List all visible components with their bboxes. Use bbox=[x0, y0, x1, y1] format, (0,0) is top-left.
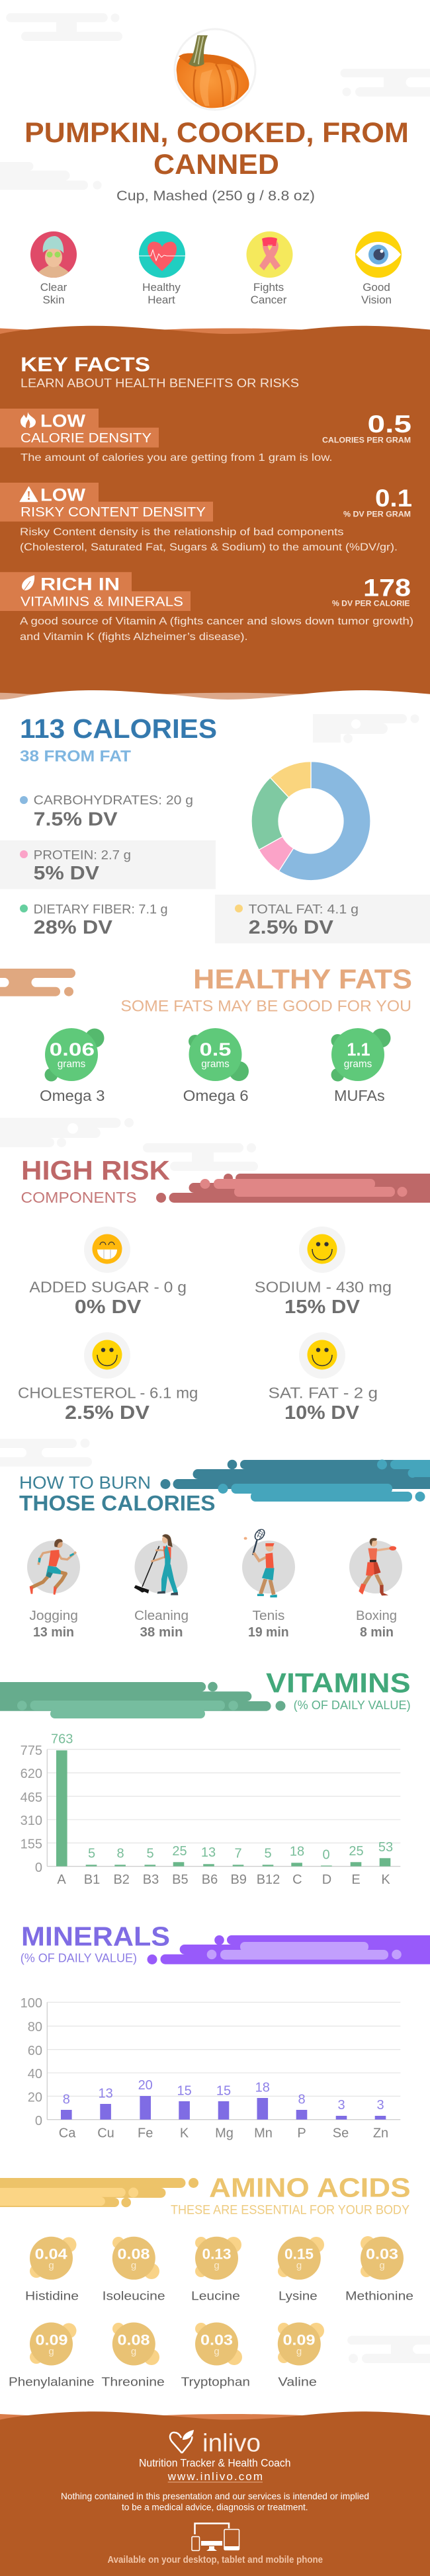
bar chart: vitamins: 25 bbox=[172, 1844, 187, 1859]
label: healthy heart: Healthy bbox=[142, 281, 181, 294]
bar chart: vitamins: 310 bbox=[21, 1814, 42, 1828]
bar chart: minerals: Zn bbox=[373, 2126, 388, 2140]
icon: good vision bbox=[355, 231, 402, 278]
bar chart: minerals: K bbox=[180, 2126, 189, 2140]
heading: 113 calories: 113 CALORIES bbox=[20, 713, 217, 744]
subheading: THESE ARE ESSENTIAL FOR YOUR BODY bbox=[171, 2203, 409, 2217]
legend: total fat: 2.5% DV bbox=[249, 917, 334, 938]
activity label: boxing: 8 min bbox=[360, 1625, 394, 1640]
bar chart: vitamins: C bbox=[292, 1872, 302, 1887]
amino: lysine: 0.15 bbox=[284, 2246, 314, 2263]
label: clear skin bbox=[40, 281, 67, 306]
hero: pumpkin photo in ring bbox=[175, 29, 255, 110]
item: added sugar bbox=[29, 1227, 187, 1318]
fat: omega 3 bbox=[40, 1028, 105, 1104]
activity label: cleaning bbox=[134, 1609, 189, 1640]
fact: risky content density: 0.1 bbox=[375, 485, 412, 512]
amino: isoleucine bbox=[103, 2237, 165, 2302]
amino: histidine: 0.04 bbox=[35, 2246, 68, 2263]
logo: inlivo bbox=[170, 2429, 261, 2457]
heading: vitamins: VITAMINS bbox=[266, 1667, 411, 1698]
panel: minerals bbox=[21, 1921, 430, 2140]
amino: threonine: 0.08 bbox=[118, 2332, 150, 2349]
bar chart: vitamins: D bbox=[322, 1872, 331, 1887]
legend: carbohydrates bbox=[20, 793, 193, 830]
activity label: jogging: 13 min bbox=[33, 1625, 74, 1640]
fat: omega 3: 0.06 bbox=[50, 1039, 95, 1060]
amino: phenylalanine bbox=[9, 2322, 95, 2388]
bar chart: vitamins: 5 bbox=[146, 1846, 154, 1861]
bar chart: minerals: Mg bbox=[215, 2126, 234, 2140]
legend: carbohydrates: 7.5% DV bbox=[34, 809, 118, 830]
subheading: 38 from fat: 38 FROM FAT bbox=[20, 747, 131, 765]
title: PUMPKIN, COOKED, FROM bbox=[24, 117, 409, 149]
amino: methionine: g bbox=[379, 2260, 385, 2271]
bar chart: minerals: Mn bbox=[254, 2126, 273, 2140]
bar chart: minerals: Cu bbox=[97, 2126, 114, 2140]
bar chart: vitamins: A bbox=[57, 1872, 66, 1887]
bar chart: vitamins: B9 bbox=[230, 1872, 247, 1887]
fat: omega 6: grams bbox=[201, 1059, 230, 1070]
fat: omega 6 bbox=[183, 1028, 249, 1104]
bar chart: vitamins: 7 bbox=[234, 1846, 242, 1861]
bar chart: vitamins: 620 bbox=[21, 1767, 42, 1781]
fact: rich in vitamins and minerals: VITAMINS & MINERALS bbox=[21, 595, 183, 610]
fat: omega 3: grams bbox=[58, 1059, 85, 1070]
activity label: jogging bbox=[29, 1609, 78, 1640]
amino: histidine: g bbox=[48, 2260, 54, 2271]
bar chart: minerals: 40 bbox=[28, 2067, 42, 2081]
fact: risky content density: % DV PER GRAM bbox=[343, 510, 411, 518]
fact: risky content density bbox=[0, 483, 412, 553]
legend: protein: 5% DV bbox=[34, 863, 100, 884]
amino: isoleucine: Isoleucine bbox=[103, 2288, 165, 2302]
item: sodium bbox=[255, 1227, 392, 1318]
bar chart: vitamins: B2 bbox=[113, 1872, 130, 1887]
bar chart: vitamins: 0 bbox=[35, 1861, 42, 1875]
benefit icons row bbox=[30, 231, 402, 306]
icon: devices bbox=[192, 2523, 239, 2551]
fact: rich in vitamins and minerals: 178 bbox=[363, 575, 411, 602]
bar chart: vitamins: 775 bbox=[21, 1744, 42, 1758]
panel: calories bbox=[0, 713, 430, 944]
amino: phenylalanine: g bbox=[48, 2346, 54, 2357]
item: sodium: 15% DV bbox=[284, 1297, 361, 1318]
activity: cleaning bbox=[134, 1534, 188, 1595]
amino: methionine: 0.03 bbox=[366, 2246, 398, 2263]
bar chart: minerals: 3 bbox=[376, 2098, 384, 2113]
heading: how to burn those calories: HOW TO BURN bbox=[19, 1473, 151, 1493]
fact: rich in vitamins and minerals: % DV PER CALORIE bbox=[332, 600, 410, 608]
label: clear skin: Clear bbox=[40, 281, 67, 294]
activity label: cleaning: Cleaning bbox=[134, 1609, 189, 1623]
subheading: SOME FATS MAY BE GOOD FOR YOU bbox=[120, 997, 411, 1015]
icon: clear skin bbox=[30, 231, 77, 278]
heading: how to burn those calories bbox=[19, 1473, 216, 1515]
fat: mufas: MUFAs bbox=[334, 1087, 385, 1104]
icon: warning triangle bbox=[20, 487, 38, 502]
item: saturated fat bbox=[269, 1332, 378, 1424]
amino: threonine: Threonine bbox=[101, 2374, 165, 2388]
amino: histidine bbox=[25, 2237, 79, 2302]
fact: risky content density: LOW bbox=[40, 485, 85, 504]
legend: total fat: TOTAL FAT: 4.1 g bbox=[249, 902, 359, 916]
bar chart: minerals: 60 bbox=[28, 2044, 42, 2058]
disclaimer bbox=[61, 2491, 369, 2513]
bar chart: vitamins: E bbox=[351, 1872, 361, 1887]
item: cholesterol bbox=[18, 1332, 198, 1424]
fact: rich in vitamins and minerals: and Vitamin K (fights Alzheimer’s disease). bbox=[20, 631, 247, 643]
bar chart: vitamins: B3 bbox=[143, 1872, 159, 1887]
label: fights cancer bbox=[251, 281, 287, 306]
bar chart: minerals: 20 bbox=[138, 2078, 153, 2093]
footer bbox=[0, 2411, 430, 2576]
label: clear skin: Skin bbox=[42, 294, 65, 306]
bar chart: minerals: 3 bbox=[337, 2098, 345, 2113]
panel: how to burn calories bbox=[19, 1460, 430, 1640]
activity: jogging bbox=[27, 1539, 80, 1595]
panel: vitamins bbox=[0, 1667, 411, 1887]
tagline: Nutrition Tracker & Health Coach bbox=[139, 2457, 291, 2470]
header shape bbox=[160, 1460, 430, 1502]
bar chart: minerals: Fe bbox=[138, 2126, 153, 2140]
item: saturated fat: 10% DV bbox=[284, 1402, 360, 1424]
item: cholesterol: 2.5% DV bbox=[65, 1402, 150, 1424]
bar chart: vitamins: 5 bbox=[264, 1846, 272, 1861]
fact: rich in vitamins and minerals: A good source of Vitamin A (fights cancer and slows down tumor growth) bbox=[20, 616, 413, 627]
heading: high risk: HIGH RISK bbox=[21, 1155, 170, 1186]
bar chart: vitamins: 155 bbox=[21, 1837, 42, 1851]
heading: minerals: MINERALS bbox=[21, 1921, 170, 1952]
bar chart: minerals: 15 bbox=[216, 2083, 231, 2098]
fat: omega 6: Omega 6 bbox=[183, 1087, 249, 1104]
subheading: (% OF DAILY VALUE) bbox=[294, 1698, 411, 1712]
fat: mufas bbox=[331, 1028, 390, 1104]
bar chart: minerals: P bbox=[297, 2126, 306, 2140]
item: added sugar: ADDED SUGAR - 0 g bbox=[29, 1278, 187, 1295]
label: fights cancer: Fights bbox=[253, 281, 284, 294]
fact: calorie density: CALORIES PER GRAM bbox=[322, 436, 411, 444]
bar chart: vitamins: 13 bbox=[201, 1845, 216, 1860]
legend: carbohydrates: CARBOHYDRATES: 20 g bbox=[34, 793, 193, 808]
legend: dietary fiber: 28% DV bbox=[34, 917, 113, 938]
pumpkin ring bbox=[175, 29, 255, 110]
header shape bbox=[0, 1682, 286, 1718]
label: healthy heart bbox=[142, 281, 181, 306]
header shape bbox=[147, 1935, 430, 1964]
bar chart: minerals: 13 bbox=[98, 2087, 113, 2101]
label: fights cancer: Cancer bbox=[251, 294, 287, 306]
heading: key facts: KEY FACTS bbox=[21, 353, 150, 376]
pumpkin illustration bbox=[177, 35, 249, 108]
amino: leucine: g bbox=[214, 2260, 220, 2271]
bar chart: vitamins bbox=[21, 1732, 400, 1887]
activity label: tennis bbox=[248, 1609, 289, 1640]
amino: valine: Valine bbox=[278, 2374, 317, 2388]
fact: rich in vitamins and minerals bbox=[0, 572, 413, 643]
icon: flame bbox=[21, 412, 36, 428]
bar chart: minerals: 8 bbox=[63, 2093, 70, 2107]
amino: valine bbox=[278, 2322, 324, 2388]
amino: isoleucine: g bbox=[131, 2260, 136, 2271]
item: sodium: SODIUM - 430 mg bbox=[255, 1278, 392, 1295]
amino: lysine: Lysine bbox=[279, 2288, 318, 2302]
fat: omega 6: 0.5 bbox=[200, 1039, 232, 1060]
legend: dietary fiber bbox=[20, 902, 168, 938]
disclaimer: Nothing contained in this presentation and our services is intended or implied bbox=[61, 2491, 369, 2501]
amino: tryptophan: 0.03 bbox=[200, 2332, 233, 2349]
icon: fights cancer bbox=[246, 231, 292, 278]
title: CANNED bbox=[153, 149, 279, 181]
header shape bbox=[0, 969, 75, 996]
bar chart: minerals: Ca bbox=[59, 2126, 76, 2140]
bar chart: minerals bbox=[21, 1996, 400, 2140]
bar chart: minerals: 100 bbox=[21, 1996, 42, 2011]
logo: inlivo: inlivo bbox=[202, 2429, 261, 2457]
subheading: (% OF DAILY VALUE) bbox=[21, 1951, 137, 1965]
heading: healthy fats: HEALTHY FATS bbox=[193, 963, 412, 994]
icon: healthy heart bbox=[139, 231, 185, 278]
amino: leucine: Leucine bbox=[191, 2288, 240, 2302]
header shape bbox=[0, 2178, 198, 2207]
amino: threonine bbox=[101, 2322, 165, 2388]
title bbox=[24, 117, 409, 181]
fact: calorie density: CALORIE DENSITY bbox=[21, 431, 151, 446]
amino: tryptophan: g bbox=[214, 2346, 220, 2357]
activity label: jogging: Jogging bbox=[29, 1609, 78, 1623]
panel: high risk components bbox=[18, 1155, 430, 1424]
icon: leaf bbox=[22, 575, 34, 590]
fact: calorie density: 0.5 bbox=[368, 411, 411, 438]
amino: valine: 0.09 bbox=[283, 2332, 315, 2349]
bar chart: vitamins: 0 bbox=[322, 1848, 330, 1863]
bar chart: vitamins: 5 bbox=[88, 1846, 95, 1861]
panel: healthy fats bbox=[0, 963, 412, 1104]
bar chart: vitamins: B6 bbox=[202, 1872, 218, 1887]
legend: protein: PROTEIN: 2.7 g bbox=[34, 848, 131, 862]
amino: methionine: Methionine bbox=[345, 2288, 413, 2302]
fat: mufas: 1.1 bbox=[347, 1039, 370, 1060]
amino: leucine bbox=[191, 2237, 241, 2302]
bar chart: minerals: 15 bbox=[177, 2083, 192, 2098]
bar chart: minerals: 80 bbox=[28, 2020, 42, 2034]
item: cholesterol: CHOLESTEROL - 6.1 mg bbox=[18, 1385, 198, 1402]
bar chart: minerals: Se bbox=[333, 2126, 349, 2140]
amino: threonine: g bbox=[131, 2346, 136, 2357]
heading: how to burn those calories: THOSE CALORIES bbox=[19, 1491, 216, 1515]
fat: omega 3: Omega 3 bbox=[40, 1087, 105, 1104]
bar chart: vitamins: 53 bbox=[378, 1840, 393, 1855]
fact: risky content density: (Cholesterol, Saturated Fat, Sugars & Sodium) to the amount (%DV/gr). bbox=[20, 542, 398, 553]
website link: www.inlivo.com bbox=[167, 2470, 263, 2483]
bar chart: vitamins: 465 bbox=[21, 1791, 42, 1805]
amino: tryptophan: Tryptophan bbox=[181, 2374, 250, 2388]
availability note: Available on your desktop, tablet and mobile phone bbox=[107, 2555, 323, 2565]
fact: risky content density: RISKY CONTENT DENSITY bbox=[21, 505, 206, 520]
subheading: components: COMPONENTS bbox=[21, 1189, 136, 1206]
fact: calorie density bbox=[0, 409, 411, 463]
bar chart: vitamins: 25 bbox=[349, 1844, 364, 1859]
fat: mufas: grams bbox=[344, 1059, 372, 1070]
activity label: tennis: Tenis bbox=[253, 1609, 284, 1623]
subheading: LEARN ABOUT HEALTH BENEFITS OR RISKS bbox=[21, 377, 299, 390]
amino: isoleucine: 0.08 bbox=[118, 2246, 150, 2263]
activity label: tennis: 19 min bbox=[248, 1625, 289, 1640]
activity: boxing bbox=[349, 1538, 402, 1595]
disclaimer: to be a medical advice, diagnosis or treatment. bbox=[122, 2502, 308, 2513]
amino: valine: g bbox=[296, 2346, 302, 2357]
amino: histidine: Histidine bbox=[25, 2288, 79, 2302]
activity label: boxing bbox=[356, 1609, 397, 1640]
header shape bbox=[156, 1174, 430, 1203]
label: healthy heart: Heart bbox=[148, 294, 175, 306]
bar chart: vitamins: B1 bbox=[84, 1872, 100, 1887]
amino: lysine: g bbox=[296, 2260, 302, 2271]
bar chart: vitamins: 763 bbox=[51, 1732, 73, 1747]
amino: tryptophan bbox=[181, 2322, 250, 2388]
heading: amino acids: AMINO ACIDS bbox=[209, 2173, 411, 2203]
bar chart: vitamins: 8 bbox=[116, 1846, 124, 1861]
label: good vision bbox=[361, 281, 392, 306]
bar chart: minerals: 8 bbox=[298, 2093, 306, 2107]
fact: risky content density: Risky Content density is the relationship of bad components bbox=[20, 526, 344, 538]
activity: tennis bbox=[242, 1528, 295, 1597]
amino: phenylalanine: 0.09 bbox=[36, 2332, 67, 2349]
legend: dietary fiber: DIETARY FIBER: 7.1 g bbox=[34, 902, 168, 916]
panel: amino acids bbox=[0, 2173, 413, 2388]
bar chart: vitamins: 18 bbox=[290, 1845, 304, 1859]
bar chart: minerals: 0 bbox=[35, 2114, 42, 2128]
legend: total fat bbox=[215, 895, 430, 944]
fact: calorie density: The amount of calories you are getting from 1 gram is low. bbox=[21, 452, 332, 463]
bar chart: vitamins: B12 bbox=[257, 1872, 280, 1887]
panel: key facts bbox=[0, 326, 430, 707]
label: good vision: Good bbox=[363, 281, 390, 294]
activity label: boxing: Boxing bbox=[356, 1609, 397, 1623]
legend: protein bbox=[0, 840, 216, 889]
bar chart: minerals: 18 bbox=[255, 2080, 270, 2095]
amino: methionine bbox=[345, 2236, 413, 2302]
label: good vision: Vision bbox=[361, 294, 392, 306]
activity label: cleaning: 38 min bbox=[140, 1625, 183, 1640]
amino: lysine bbox=[278, 2237, 324, 2302]
amino: leucine: 0.13 bbox=[202, 2246, 232, 2263]
bar chart: minerals: 20 bbox=[28, 2091, 42, 2105]
bar chart: vitamins: B5 bbox=[172, 1872, 189, 1887]
serving size subtitle: Cup, Mashed (250 g / 8.8 oz) bbox=[116, 188, 315, 204]
item: saturated fat: SAT. FAT - 2 g bbox=[269, 1385, 378, 1402]
fact: rich in vitamins and minerals: RICH IN bbox=[40, 575, 120, 594]
item: added sugar: 0% DV bbox=[75, 1297, 142, 1318]
amino: phenylalanine: Phenylalanine bbox=[9, 2374, 95, 2388]
fact: calorie density: LOW bbox=[40, 411, 85, 431]
donut chart bbox=[251, 762, 370, 881]
bar chart: vitamins: K bbox=[381, 1872, 390, 1887]
